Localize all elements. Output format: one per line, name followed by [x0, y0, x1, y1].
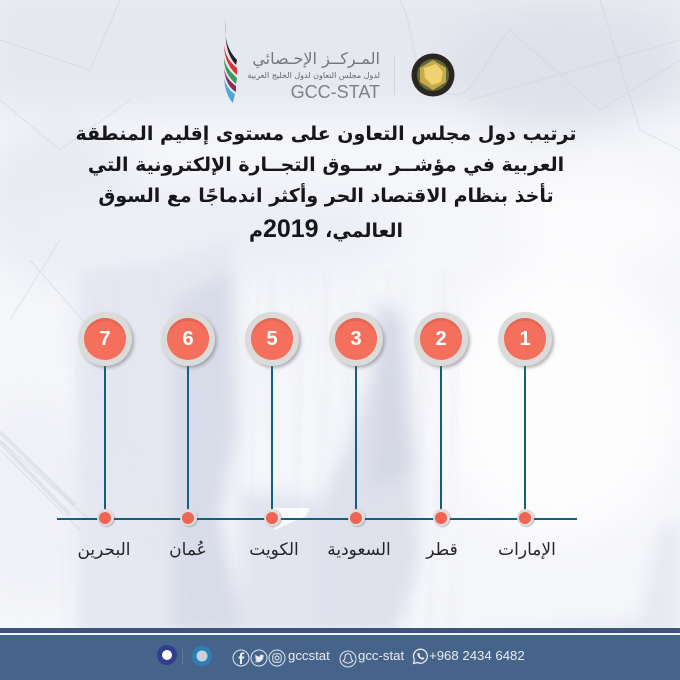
icon: vertical separator and GCC emblem [394, 54, 454, 96]
timeline chart [57, 312, 577, 560]
rank 2 marker [414, 312, 468, 366]
axis line [57, 518, 577, 520]
rank 5 marker [245, 312, 299, 366]
axis dot Kuwait [264, 509, 280, 526]
icon: whatsapp [412, 648, 428, 664]
rank 3 marker: 3 [350, 328, 362, 350]
handle gcc-stat: gcc-stat [358, 648, 404, 663]
title: العالمي، 2019م [249, 215, 403, 243]
icon: twitter [250, 650, 268, 666]
footer stripe [0, 633, 680, 635]
rank 7 marker [78, 312, 132, 366]
logo: Arabic subtitle: لدول مجلس التعاون لدول الخليج العربية [247, 71, 380, 80]
logo: GCC-STAT wordmark: GCC-STAT [291, 82, 380, 102]
handle gccstat: gccstat [288, 648, 330, 663]
rank 6 marker: 6 [182, 328, 194, 350]
rank 1 marker: 1 [519, 328, 531, 350]
icon: GCC-STAT ribbon [224, 20, 237, 103]
rank 3 marker [329, 312, 383, 366]
label Oman: عُمان [169, 540, 207, 560]
logo: Arabic organisation name: المـركــز الإحـصائي [252, 49, 380, 68]
title: تأخذ بنظام الاقتصاد الحر وأكثر اندماجًا مع السوق [98, 185, 554, 207]
title [75, 123, 576, 243]
icon: instagram [268, 650, 286, 666]
axis dot Qatar [432, 509, 450, 526]
phone number: +968 2434 6482 [429, 648, 525, 663]
axis dot Oman [180, 509, 196, 526]
axis dot UAE [516, 509, 534, 526]
title: ترتيب دول مجلس التعاون على مستوى إقليم المنطقة [75, 123, 576, 145]
rank 5 marker: 5 [266, 328, 278, 350]
label UAE: الإمارات [498, 540, 556, 560]
label Qatar: قطر [426, 540, 458, 560]
axis dot Saudi Arabia [348, 509, 364, 526]
label Kuwait: الكويت [249, 540, 299, 560]
icon: facebook [232, 650, 250, 666]
icon: snapchat [340, 650, 356, 668]
label Bahrain: البحرين [77, 540, 131, 560]
rank 2 marker: 2 [435, 328, 447, 350]
rank 1 marker [498, 312, 552, 366]
rank 6 marker [161, 312, 215, 366]
footer [0, 628, 680, 680]
header logos [224, 20, 454, 103]
axis dot Bahrain [96, 509, 114, 526]
icon: certification badges [157, 645, 212, 666]
label Saudi Arabia: السعودية [327, 540, 391, 560]
rank 7 marker: 7 [99, 328, 111, 350]
title: العربية في مؤشــر ســوق التجــارة الإلكترونية التي [88, 154, 564, 176]
